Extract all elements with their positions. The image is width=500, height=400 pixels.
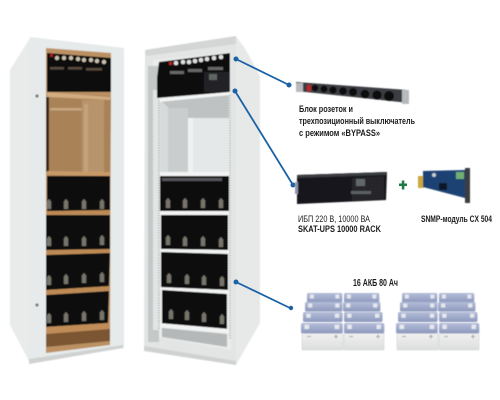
left cabinet batteries xyxy=(47,200,104,323)
socket strip caption: с режимом «BYPASS» xyxy=(299,128,380,139)
leader line: batteries xyxy=(234,280,293,310)
left cabinet glass xyxy=(46,48,111,353)
UPS caption xyxy=(298,214,381,235)
right cabinet shelves xyxy=(159,92,230,347)
UPS caption: SKAT-UPS 10000 RACK xyxy=(298,224,381,235)
right cabinet rails xyxy=(159,95,230,340)
right cabinet frame xyxy=(144,36,236,365)
right cabinet xyxy=(144,36,260,365)
leader line: UPS xyxy=(232,88,296,188)
right cabinet side panel xyxy=(236,36,260,365)
leader line: socket strip xyxy=(234,56,292,88)
right cabinet socket strip xyxy=(169,55,223,74)
right cabinet top cap xyxy=(145,36,236,56)
right cabinet interior xyxy=(152,52,231,350)
left cabinet xyxy=(10,37,124,364)
UPS unit xyxy=(295,172,387,204)
right cabinet UPS xyxy=(157,53,230,98)
socket strip caption xyxy=(299,104,415,139)
plus sign xyxy=(399,180,407,190)
right cabinet batteries xyxy=(162,178,224,324)
right cabinet plinth xyxy=(144,346,236,365)
battery illustration: right group xyxy=(396,293,479,350)
SNMP module xyxy=(418,168,470,203)
left cabinet side panel xyxy=(10,38,30,363)
left cabinet shelves xyxy=(46,171,110,347)
left cabinet door hinges xyxy=(35,94,39,307)
socket strip caption: трехпозиционный выключатель xyxy=(299,116,415,127)
left cabinet socket strip xyxy=(50,54,106,70)
left cabinet front door xyxy=(29,37,124,363)
socket strip caption: Блок розеток и xyxy=(299,104,353,115)
UPS caption: ИБП 220 В, 10000 ВА xyxy=(298,214,370,225)
battery caption: 16 АКБ 80 Ач xyxy=(353,278,398,289)
battery illustration: left group xyxy=(301,293,384,350)
socket strip xyxy=(296,82,409,104)
